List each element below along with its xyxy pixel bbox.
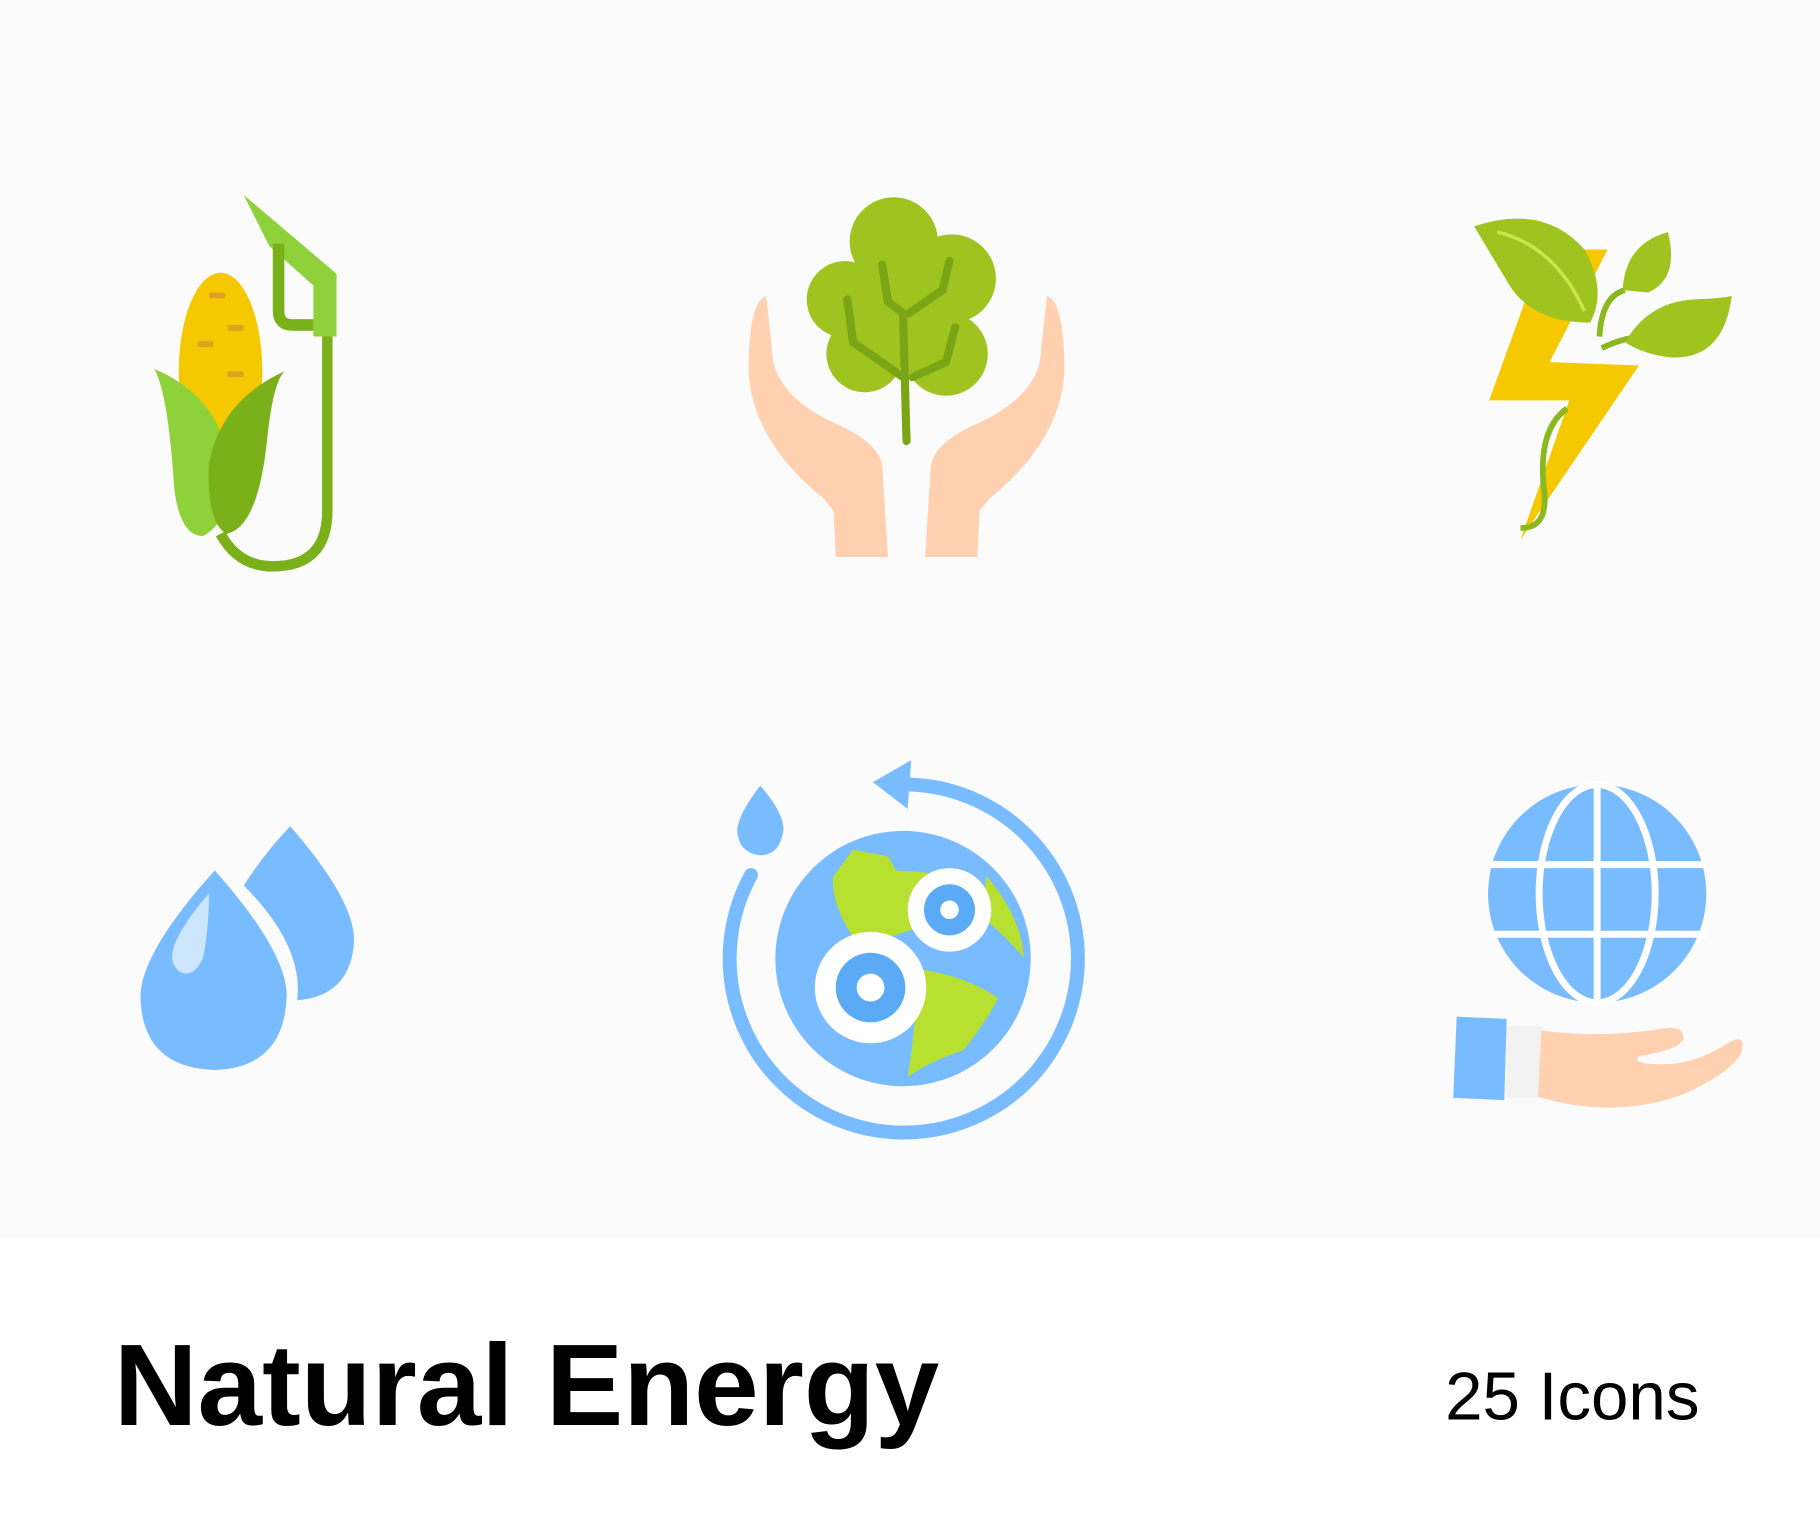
subtitle: icon count: 25 Icons (1445, 1359, 1700, 1434)
icon: globe on hand (1453, 785, 1743, 1108)
icon: water drops (140, 826, 354, 1070)
icon: lightning bolt with leaves (1474, 219, 1732, 540)
icon: corn fuel pump (154, 195, 337, 566)
icon: hands holding tree (749, 197, 1064, 557)
title: Natural Energy (114, 1320, 939, 1450)
icon: globe with gears and cycle (730, 760, 1078, 1133)
